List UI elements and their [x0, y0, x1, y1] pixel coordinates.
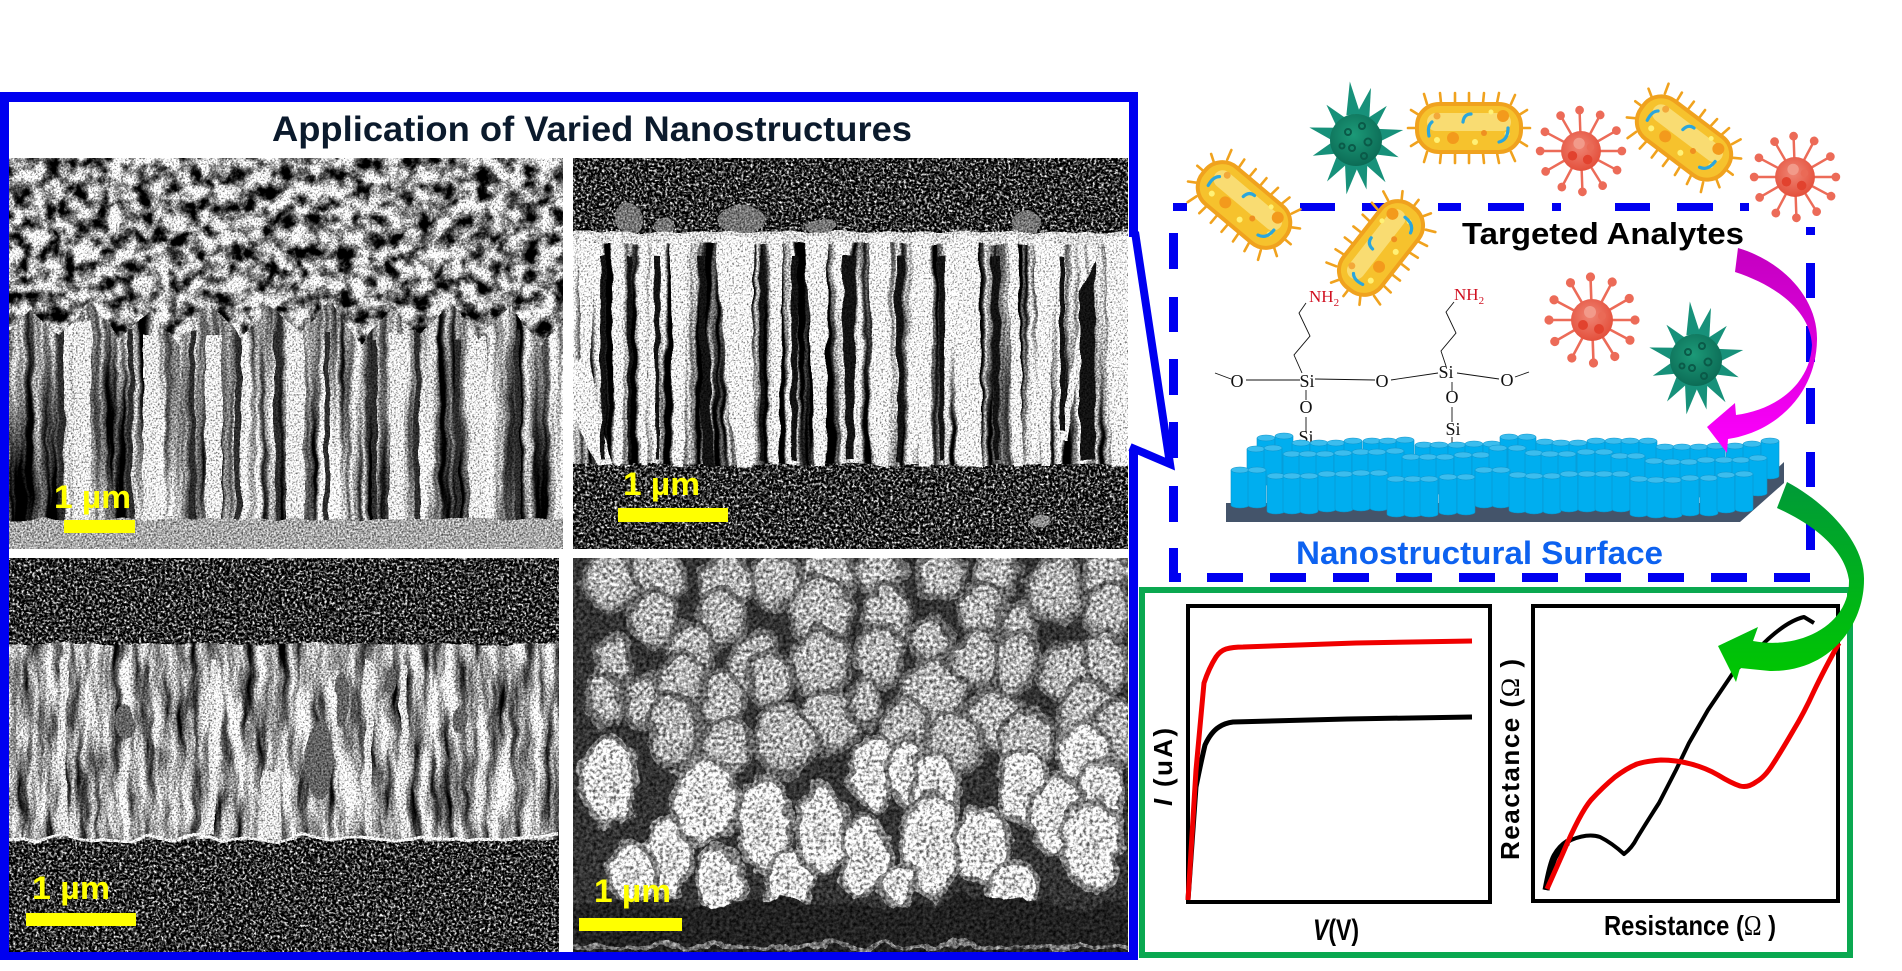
icon: bacterium, top tilted [1614, 73, 1754, 203]
icon: bacterium, top horizontal [1408, 93, 1530, 163]
callout wedge linking SEM panel to surface [1130, 232, 1170, 464]
scale bar: top right: 1 µm [623, 466, 700, 502]
icon: green spiky pathogen, inside box [1648, 301, 1745, 416]
scale bar: top left: 1 µm [54, 479, 131, 515]
blue frame around SEM panels [0, 92, 1138, 960]
chemical structure: aminosilane linker: O [1500, 370, 1514, 390]
panel: SEM image bottom right, clustered nanostructures [565, 549, 1135, 969]
chemical structure: aminosilane linker: NH [1309, 287, 1334, 306]
chart axis label: current: I (uA) [1148, 728, 1178, 806]
panel: SEM image top left, nanopillars with clumped tops [0, 150, 570, 555]
chart: I-V curves [1188, 606, 1490, 902]
chemical structure: aminosilane linker: O [1446, 387, 1458, 407]
label: nanostructural surface: Nanostructural Surface [1296, 535, 1663, 571]
arrow: magenta, analytes to surface [1707, 248, 1817, 453]
heading: targeted analytes: Targeted Analytes [1462, 216, 1744, 251]
arrow: green, surface to measurement [1718, 482, 1864, 682]
panel: green measurement box [1142, 590, 1850, 955]
scale bar: bottom right: 1 µm [594, 873, 671, 909]
chart axis label: resistance: Resistance (Ω ) [1604, 910, 1776, 942]
chemical structure: aminosilane linker: Si [1299, 371, 1315, 391]
icon: bacterium, centre tilted [1316, 178, 1446, 318]
chemical structure: aminosilane linker: O [1300, 397, 1312, 417]
panel: SEM image bottom left, dense columnar film [0, 550, 570, 960]
chemical structure: aminosilane linker: NH [1454, 285, 1479, 304]
chemical structure: aminosilane linker: 2 [1334, 297, 1339, 309]
icon: bacterium, left tilted [1175, 139, 1313, 271]
scale bar: bottom right [579, 873, 682, 931]
chart axis label: reactance: Reactance (Ω ) [1495, 659, 1525, 860]
chemical structure: aminosilane linker: Si [1445, 419, 1461, 439]
chemical structure: aminosilane linker: O [1376, 371, 1388, 391]
icon: green spiky pathogen, top [1308, 81, 1405, 196]
title: Application of Varied Nanostructures [272, 110, 912, 149]
icon: virus, inside box [1544, 272, 1640, 368]
scale bar: top left [54, 479, 135, 533]
chart axis label: voltage: V(V) [1313, 914, 1359, 947]
chart: impedance Nyquist curves [1533, 606, 1839, 901]
chemical structure: aminosilane linker: O [1230, 371, 1244, 391]
chemical structure: aminosilane linker: Si [1298, 427, 1314, 447]
scale bar: top right [618, 466, 728, 522]
icon: virus, top [1536, 106, 1626, 196]
chemical structure: aminosilane linker: Si [1438, 362, 1454, 382]
scale bar: bottom left: 1 µm [32, 870, 110, 906]
chemical structure: aminosilane linker: 2 [1479, 295, 1484, 307]
dashed box around sensing surface [1169, 203, 1815, 582]
chemical structure: aminosilane linker [1215, 285, 1529, 447]
nanostructural surface: substrate and cylinders [1226, 433, 1784, 522]
panel: SEM image top right, tall bright nanopillars [565, 150, 1135, 560]
scale bar: bottom left [26, 870, 136, 926]
icon: virus, top right [1750, 132, 1840, 222]
